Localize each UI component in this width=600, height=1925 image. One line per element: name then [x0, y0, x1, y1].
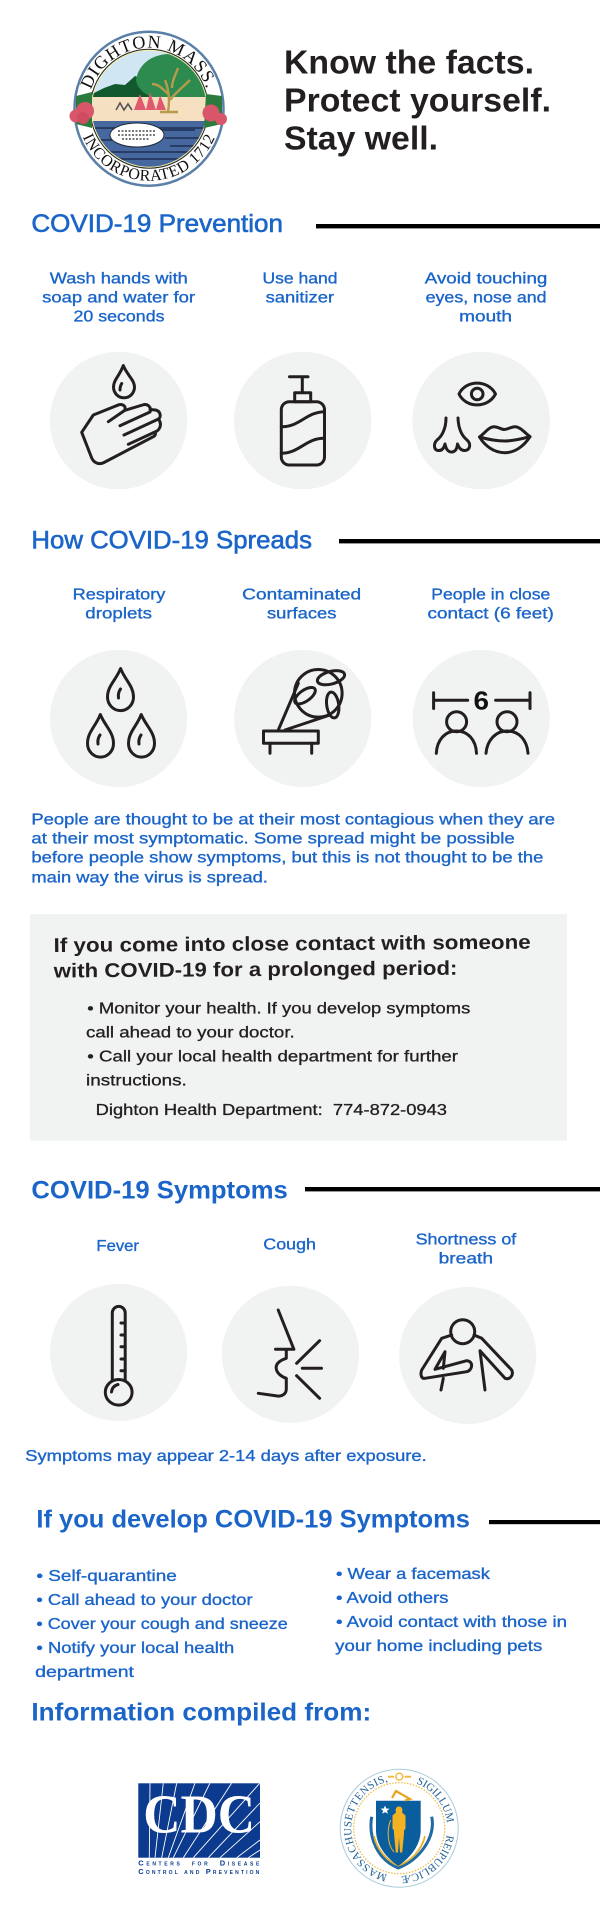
logo: CDC: Control and Prevention — [138, 1867, 260, 1876]
list: actions left: department — [35, 1664, 135, 1681]
icon: cough — [222, 1286, 359, 1423]
list: actions right: • Avoid contact with those in — [336, 1614, 567, 1631]
logo: CDC: Centers for Disease — [138, 1859, 260, 1868]
label: people in close contact — [428, 586, 554, 622]
label: avoid touching: eyes, nose and — [426, 289, 547, 306]
left flowers — [70, 92, 94, 128]
list: actions left — [35, 1568, 288, 1681]
logo: Massachusetts state seal: SIGILLUM — [417, 1778, 454, 1823]
panel list — [86, 1000, 470, 1119]
paragraph: contagiousness: before people show symptoms, but this is not thought to be the — [31, 849, 544, 866]
list: actions right: your home including pets — [335, 1638, 542, 1655]
logo: Massachusetts state seal: MASSACHUSETTENSIS, — [344, 1776, 388, 1882]
label: contaminated surfaces — [242, 586, 361, 622]
town seal of Dighton: INCORPORATED 1712 — [82, 132, 215, 181]
panel list: • Monitor your health. If you develop symptoms — [87, 1000, 470, 1017]
title — [284, 43, 551, 156]
list: actions right — [335, 1566, 567, 1655]
heading: If you develop COVID-19 Symptoms: If you develop COVID-19 Symptoms — [36, 1505, 470, 1533]
label: shortness of breath: breath — [439, 1250, 493, 1267]
title: Protect yourself. — [284, 81, 551, 118]
title: Know the facts. — [284, 43, 534, 80]
title: Stay well. — [284, 119, 438, 156]
list: actions left: • Notify your local health — [36, 1640, 234, 1657]
label: people in close contact: People in close — [431, 586, 550, 603]
panel: close contact advice — [30, 914, 567, 1141]
logo: Massachusetts state seal: REIPUBLICÆ — [402, 1835, 454, 1884]
town seal of Dighton — [70, 30, 227, 187]
heading: information compiled from: Information compiled from: — [31, 1699, 371, 1727]
paragraph: contagiousness — [31, 811, 555, 886]
label: contaminated surfaces: surfaces — [267, 605, 336, 622]
label: shortness of breath — [416, 1231, 517, 1267]
panel list: instructions. — [86, 1072, 187, 1089]
heading: How COVID-19 Spreads: How COVID-19 Spreads — [31, 526, 312, 554]
icon: hand washing — [50, 352, 187, 489]
heading: COVID-19 Prevention: COVID-19 Prevention — [31, 210, 283, 238]
label: respiratory droplets — [73, 586, 165, 622]
label: fever: Fever — [96, 1238, 140, 1255]
icon: six feet apart: 6 — [474, 685, 489, 715]
label: avoid touching: mouth — [459, 308, 512, 325]
label: contaminated surfaces: Contaminated — [242, 586, 361, 603]
label: wash hands — [42, 270, 196, 325]
panel heading: with COVID-19 for a prolonged period: — [53, 958, 458, 983]
right flowers — [202, 94, 227, 128]
icon: sanitizer bottle — [234, 352, 372, 489]
icon: droplets — [50, 650, 187, 787]
logo: CDC — [138, 1783, 260, 1876]
label: shortness of breath: Shortness of — [416, 1231, 517, 1248]
logo: CDC: CDC — [143, 1784, 255, 1844]
list: actions right: • Avoid others — [336, 1590, 448, 1607]
list: actions left: • Call ahead to your doctor — [36, 1592, 253, 1609]
icon: six feet apart — [413, 650, 550, 787]
label: cough: Cough — [263, 1236, 316, 1253]
logo: Massachusetts state seal — [340, 1768, 459, 1888]
panel list: • Call your local health department for further — [87, 1048, 459, 1065]
icon: shortness of breath — [399, 1287, 536, 1424]
town seal of Dighton: DIGHTON MASS. — [80, 36, 214, 90]
note: symptom onset: Symptoms may appear 2-14 days after exposure. — [25, 1448, 427, 1465]
label: wash hands: Wash hands with — [50, 270, 188, 287]
label: avoid touching: Avoid touching — [425, 270, 547, 287]
label: respiratory droplets: droplets — [85, 605, 152, 622]
panel list: Dighton Health Department: 774-872-0943 — [96, 1102, 447, 1119]
list: actions left: • Cover your cough and sneeze — [36, 1616, 288, 1633]
label: use hand sanitizer: Use hand — [262, 270, 338, 287]
label: wash hands: 20 seconds — [74, 308, 164, 325]
label: people in close contact: contact (6 feet) — [428, 605, 554, 622]
label: avoid touching — [425, 270, 547, 325]
list: actions left: • Self-quarantine — [36, 1568, 177, 1585]
paragraph: contagiousness: at their most symptomatic. Some spread might be possible — [31, 830, 515, 847]
paragraph: contagiousness: People are thought to be at their most contagious when they are — [31, 811, 555, 828]
heading: COVID-19 Symptoms: COVID-19 Symptoms — [31, 1176, 288, 1204]
icon: contaminated surface — [234, 650, 371, 787]
label: use hand sanitizer — [262, 270, 338, 306]
icon: thermometer — [50, 1284, 187, 1421]
icon: eye, nose and mouth — [412, 352, 550, 489]
panel heading: If you come into close contact with someone — [53, 932, 531, 957]
label: respiratory droplets: Respiratory — [73, 586, 165, 603]
panel list: call ahead to your doctor. — [86, 1024, 295, 1041]
paragraph: contagiousness: main way the virus is spread. — [31, 869, 268, 886]
list: actions right: • Wear a facemask — [336, 1566, 491, 1583]
panel heading — [52, 932, 531, 983]
label: use hand sanitizer: sanitizer — [266, 289, 335, 306]
label: wash hands: soap and water for — [42, 289, 196, 306]
